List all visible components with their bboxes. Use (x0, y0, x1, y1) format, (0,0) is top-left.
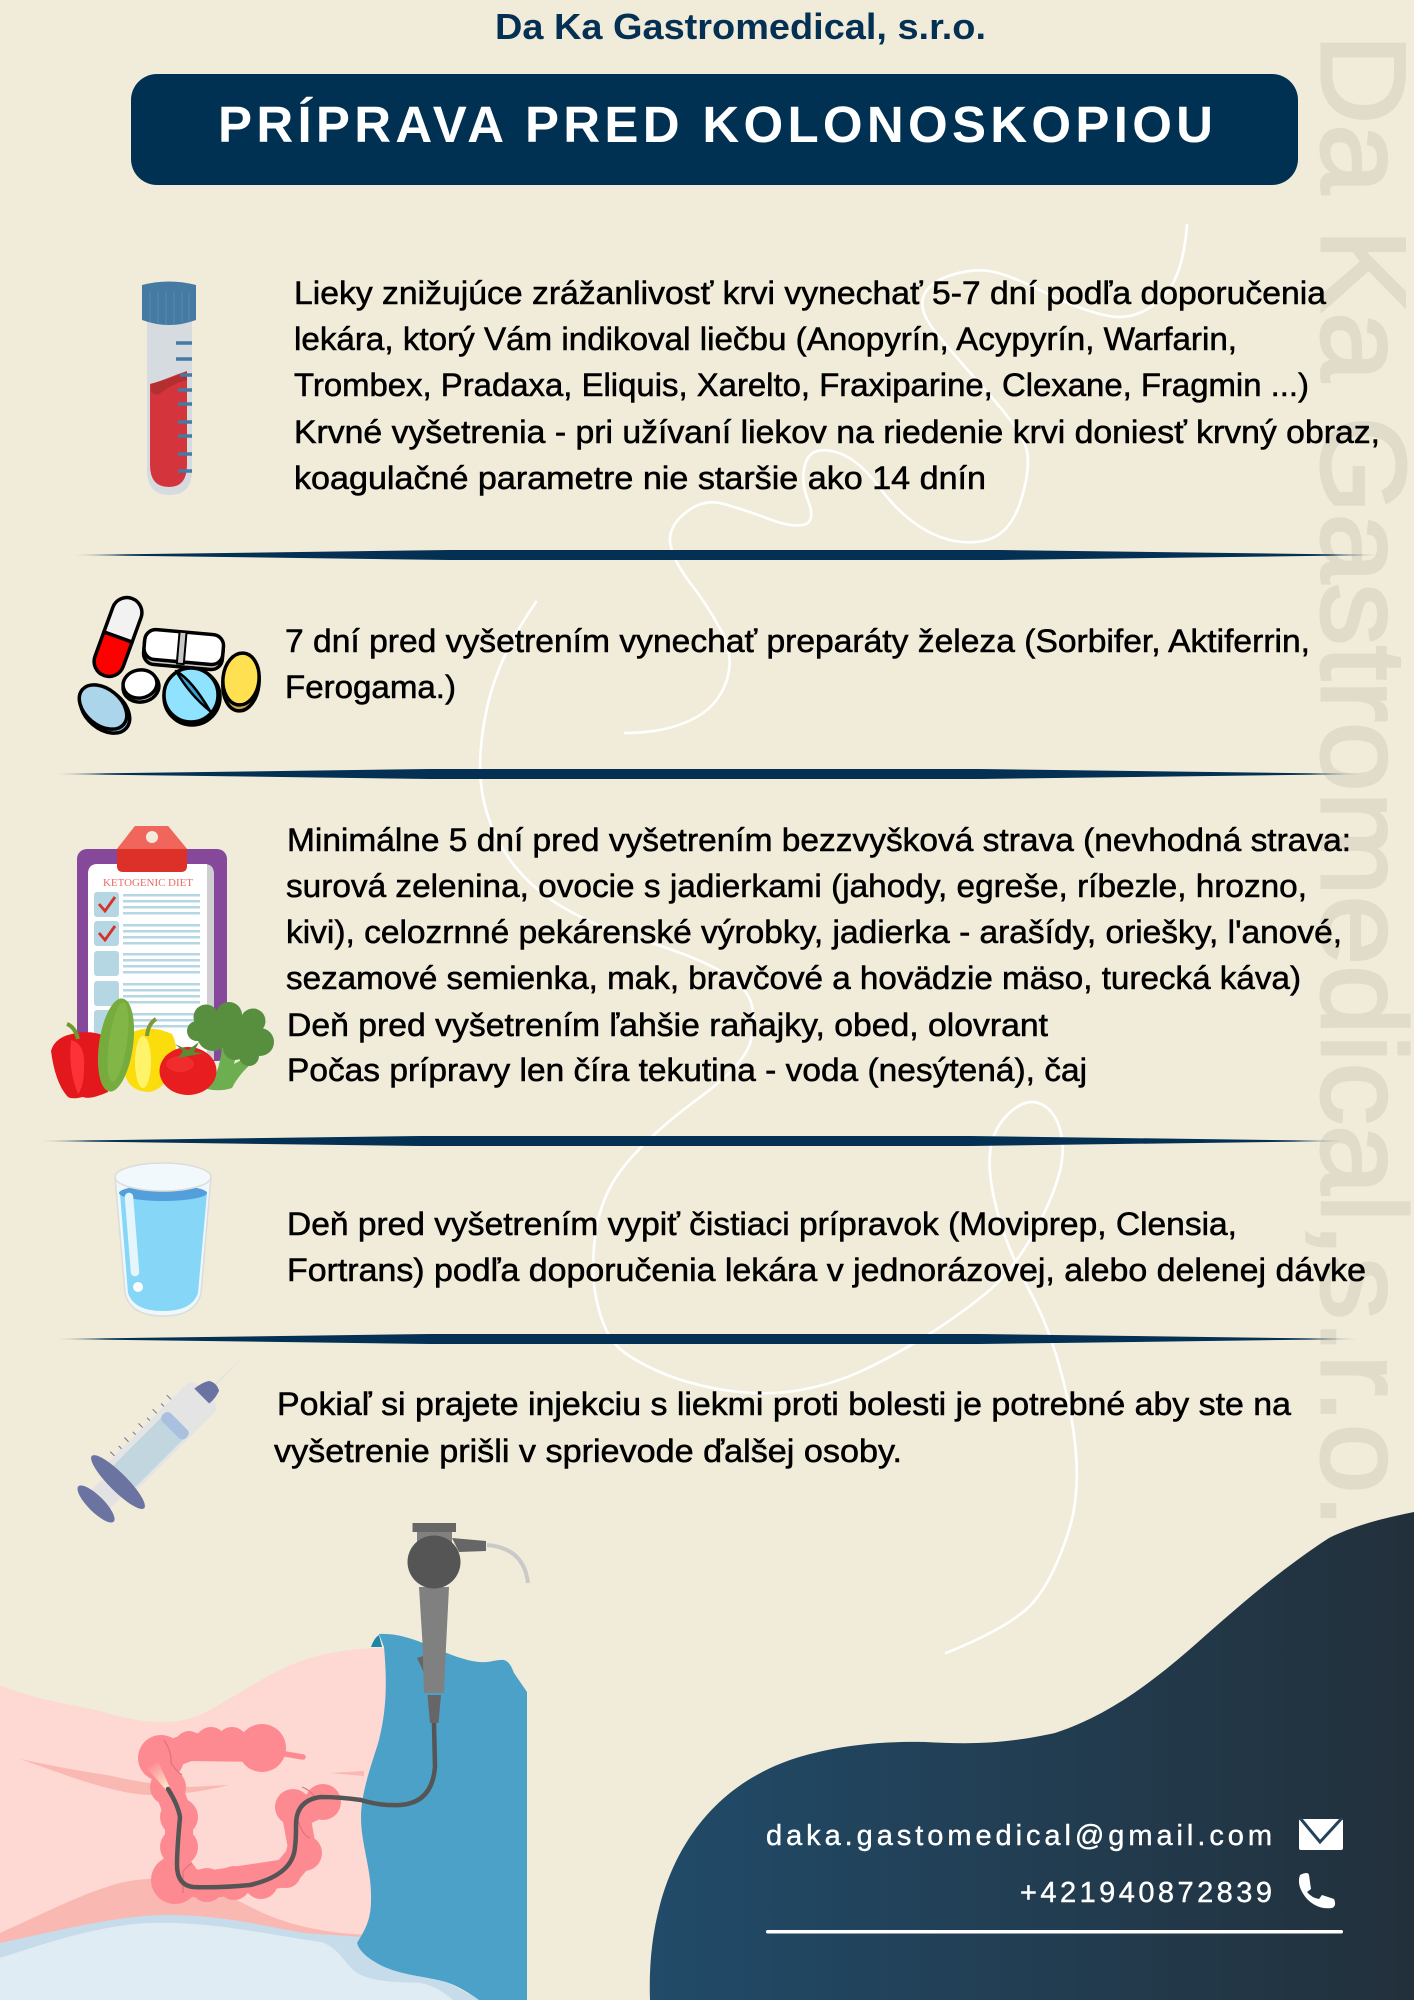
text block: injection (274, 1386, 1291, 1469)
decorative white squiggle lines (480, 225, 1187, 1653)
text block: blood thinners (294, 275, 1380, 496)
text block: blood thinners: Lieky znižujúce zrážanlivosť krvi vynechať 5-7 dní podľa doporučenia (294, 275, 1326, 311)
yellow pepper (125, 1019, 176, 1092)
text block: diet: sezamové semienka, mak, bravčové a hovädzie mäso, turecká káva) (286, 960, 1301, 996)
text block: injection: vyšetrenie prišli v sprievode ďalšej osoby. (274, 1433, 902, 1469)
endoscope (408, 1523, 528, 1723)
text block: cleansing preparation: Fortrans) podľa doporučenia lekára v jednorázovej, alebo delenej dávke (287, 1252, 1366, 1288)
text block: iron supplements (285, 623, 1310, 705)
title text: PRÍPRAVA PRED KOLONOSKOPIOU (218, 96, 1213, 153)
text block: iron supplements: 7 dní pred vyšetrením vynechať preparáty železa (Sorbifer, Aktiferrin, (285, 623, 1310, 659)
text block: diet: Minimálne 5 dní pred vyšetrením bezzvyšková strava (nevhodná strava: (287, 822, 1351, 858)
patient gown (357, 1634, 527, 2000)
text block: blood thinners: lekára, ktorý Vám indikoval liečbu (Anopyrín, Acypyrín, Warfarin, (294, 321, 1237, 357)
text block: iron supplements: Ferogama.) (285, 669, 456, 705)
icon: diet clipboard with vegetables (51, 826, 274, 1098)
contact panel (650, 1512, 1414, 2000)
email: daka.gastomedical@gmail.com (766, 1820, 1272, 1852)
text block: diet: Deň pred vyšetrením ľahšie raňajky, obed, olovrant (287, 1007, 1048, 1043)
patient body (0, 1648, 400, 1945)
colon (138, 1724, 341, 1904)
text block: diet (286, 822, 1351, 1088)
company name heading: Da Ka Gastromedical, s.r.o. (495, 6, 986, 47)
text block: diet: surová zelenina, ovocie s jadierkami (jahody, egreše, ríbezle, hrozno, (286, 868, 1307, 904)
text block: cleansing preparation (287, 1206, 1366, 1288)
icon: phone (1299, 1873, 1335, 1908)
title banner (131, 74, 1298, 185)
red pepper (51, 1024, 108, 1098)
endoscope light glow (147, 1761, 170, 1790)
text block: blood thinners: Trombex, Pradaxa, Eliquis, Xarelto, Fraxiparine, Clexane, Fragmin ...) (294, 367, 1309, 403)
icon: pills (71, 593, 262, 743)
text block: diet: Počas prípravy len číra tekutina - voda (nesýtená), čaj (287, 1052, 1087, 1088)
contact underline (766, 1930, 1343, 1934)
icon: blood test tube (142, 282, 196, 495)
text block: injection: Pokiaľ si prajete injekciu s liekmi proti bolesti je potrebné aby ste na (277, 1386, 1291, 1422)
text block: blood thinners: koagulačné parametre nie staršie ako 14 dnín (294, 460, 986, 496)
clipboard heading: KETOGENIC DIET (103, 877, 193, 889)
cucumber (93, 996, 139, 1094)
endoscope cable (168, 1724, 435, 1887)
broccoli (187, 1002, 274, 1090)
phone number: +421940872839 (1020, 1877, 1272, 1909)
icon: syringe (64, 1329, 271, 1536)
icon: glass of water (115, 1163, 211, 1316)
text block: blood thinners: Krvné vyšetrenia - pri užívaní liekov na riedenie krvi doniesť krvný obraz, (294, 414, 1380, 450)
text block: cleansing preparation: Deň pred vyšetrením vypiť čistiaci prípravok (Moviprep, Clensia, (287, 1206, 1237, 1242)
illustration: colonoscopy (0, 1523, 528, 2000)
text block: diet: kivi), celozrnné pekárenské výrobky, jadierka - arašídy, oriešky, l'anové, (286, 914, 1342, 950)
tomato (160, 1042, 216, 1095)
icon: envelope (1299, 1818, 1343, 1850)
